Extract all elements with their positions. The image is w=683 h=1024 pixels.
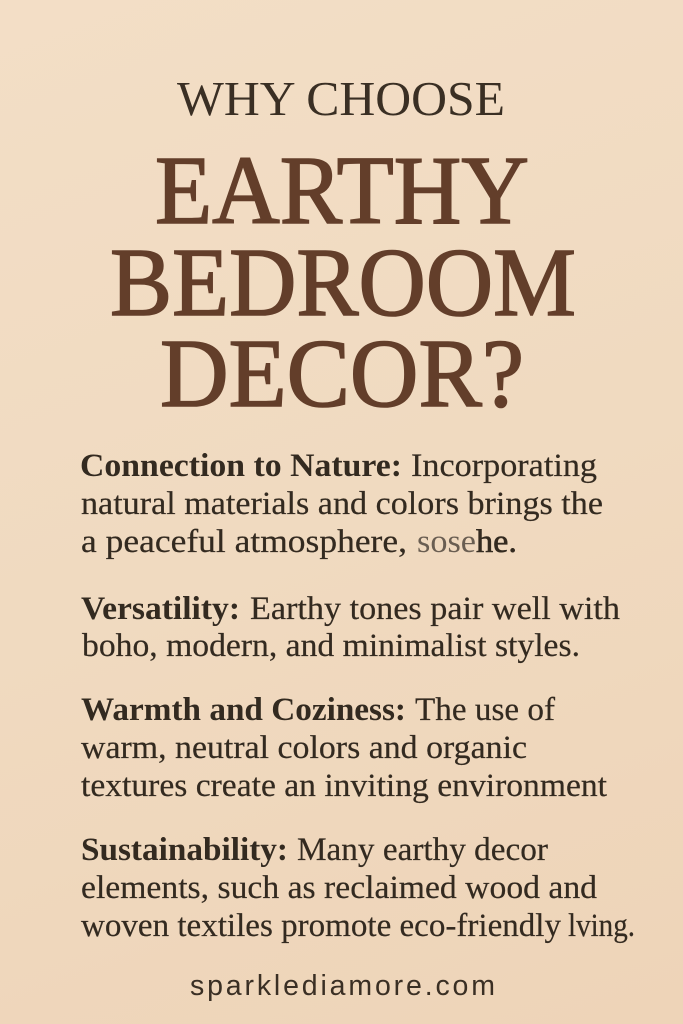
text block: warmth and coziness: The use of <box>415 692 555 728</box>
text block: warmth and coziness: warm, neutral colors and organic <box>81 730 527 766</box>
text block: connection to nature: sose <box>417 524 476 560</box>
text block: sustainability: elements, such as reclaimed wood and <box>81 870 598 906</box>
text block: versatility: Versatility: <box>81 591 240 627</box>
text block: sustainability: woven textiles promote eco-friendly <box>81 908 561 944</box>
text block: sustainability: Sustainability: <box>81 832 288 868</box>
text block: sustainability: Many earthy decor <box>297 832 548 868</box>
title main line 2: BEDROOM <box>110 229 576 337</box>
text block: connection to nature: Incorporating <box>411 448 597 484</box>
text block: sustainability: lving. <box>568 908 635 944</box>
text block: warmth and coziness <box>81 692 607 804</box>
text block: connection to nature: Connection to Nature: <box>80 448 402 484</box>
text block: connection to nature: natural materials and colors brings the <box>81 486 603 522</box>
text block: versatility: Earthy tones pair well with <box>250 591 621 627</box>
title main line 1: EARTHY <box>155 137 529 245</box>
title main line 3: DECOR? <box>160 320 524 428</box>
text block: sustainability <box>81 832 635 944</box>
title <box>110 73 576 428</box>
text block: versatility: boho, modern, and minimalist styles. <box>82 628 580 664</box>
text block: versatility <box>81 591 621 664</box>
text block: connection to nature: a peaceful atmosphere, <box>81 524 407 560</box>
title kicker: WHY CHOOSE <box>177 73 505 126</box>
text block: connection to nature: he. <box>476 524 517 560</box>
text block: warmth and coziness: Warmth and Coziness: <box>81 692 406 728</box>
website footer: sparklediamore.com <box>190 970 495 1002</box>
text block: connection to nature <box>80 448 603 560</box>
text block: warmth and coziness: textures create an inviting environment <box>81 768 607 804</box>
